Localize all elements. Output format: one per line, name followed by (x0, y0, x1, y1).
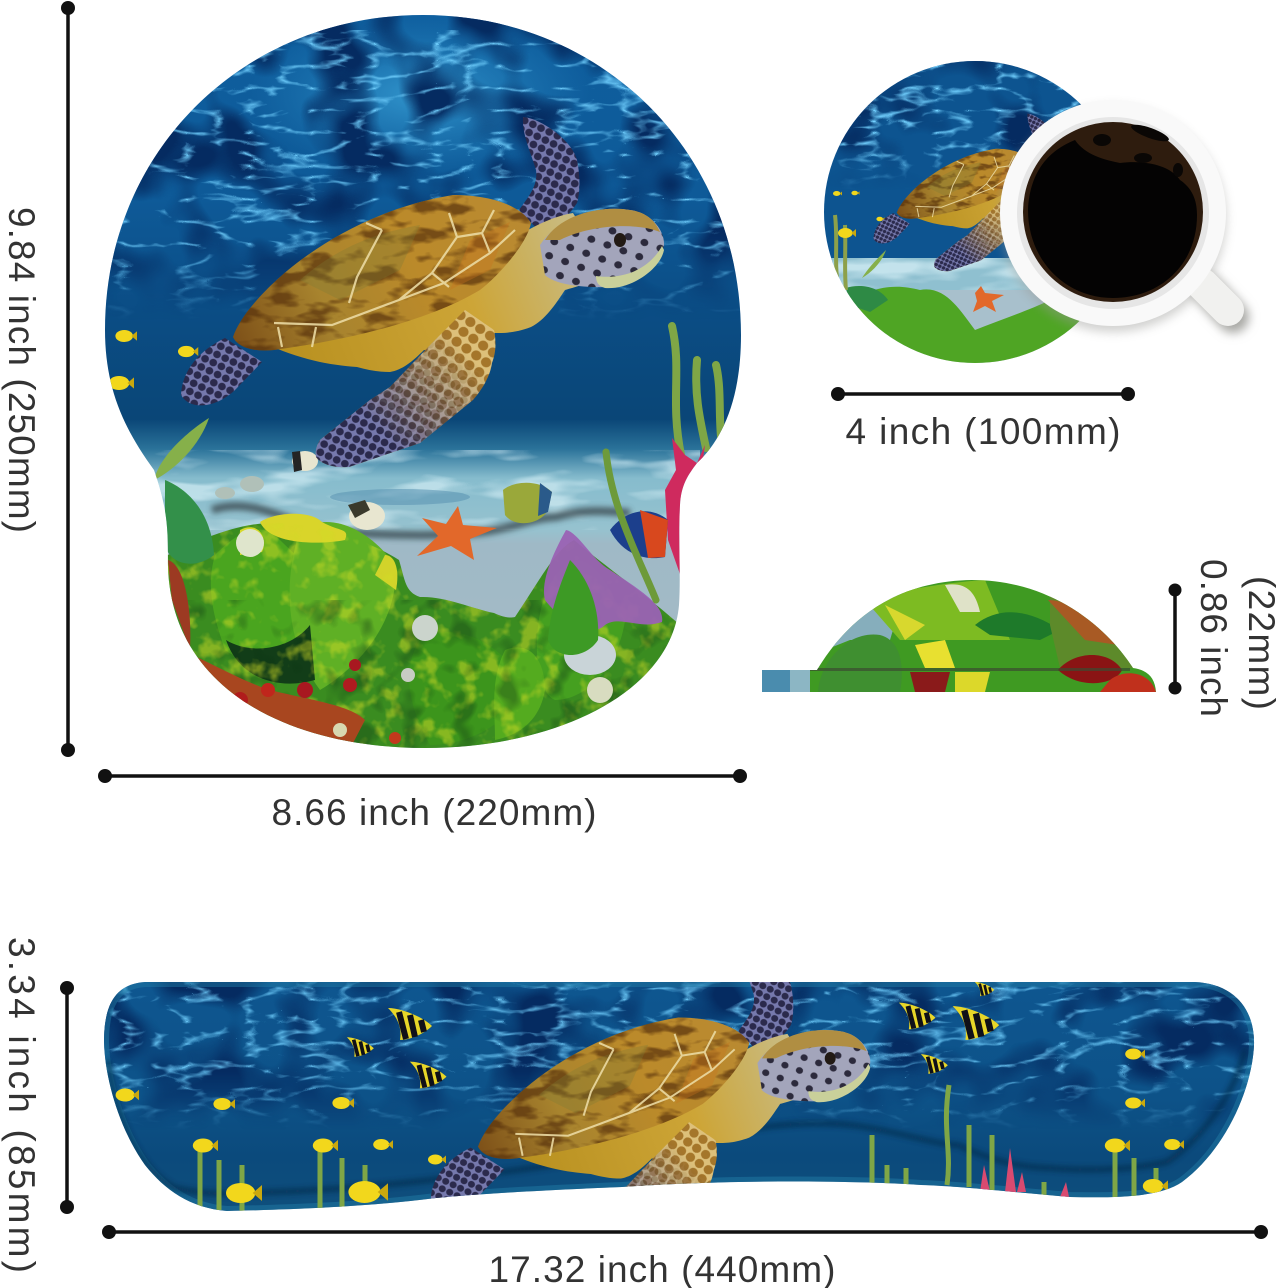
seaweed front (606, 452, 656, 600)
tropical fish (109, 330, 668, 558)
panel: wrist support side profile (762, 575, 1160, 695)
dimension: coaster width: 4 inch (100mm) (846, 411, 1120, 452)
sand dark patch (330, 489, 470, 505)
dimension: wrist rest height (1, 937, 74, 1273)
panel: round coaster (824, 61, 1081, 363)
cushion edge line (108, 1050, 1245, 1194)
cushion edge band (104, 982, 1254, 1211)
icon: coffee cup (1000, 100, 1233, 332)
purple coral (544, 530, 662, 630)
pink coral (665, 438, 705, 580)
starfish (417, 506, 497, 560)
dimension: coaster width (831, 387, 1135, 452)
sand ripples (140, 450, 700, 530)
water light at surface (282, 31, 558, 160)
sea turtle (181, 117, 664, 467)
panel: mouse pad with wrist support (100, 10, 750, 760)
striped fish (347, 982, 999, 1088)
seaweed (200, 1085, 1156, 1215)
dimension: mouse pad height: 9.84 inch (250mm) (1, 207, 42, 533)
foliage: green plants (150, 480, 690, 760)
dimension: mouse pad height (1, 1, 75, 757)
wrist rest edge (212, 506, 630, 535)
seaweed (672, 326, 722, 455)
seaweed leaf left (154, 418, 209, 480)
dimension: profile height: 0.86 inch (1193, 559, 1234, 717)
dimension: wrist rest width (102, 1225, 1268, 1288)
water texture (108, 16, 736, 312)
dimension: mouse pad width (98, 769, 747, 833)
dimension: mouse pad width: 8.66 inch (220mm) (272, 792, 596, 833)
dimension: wrist rest height: 3.34 inch (85mm) (1, 937, 42, 1273)
sea turtle (430, 982, 870, 1199)
yellow fish (116, 1048, 1184, 1203)
panel: keyboard wrist rest (104, 982, 1254, 1211)
dimension: profile height (1168, 559, 1280, 717)
green leaf over coral (548, 560, 598, 655)
water texture (104, 982, 1254, 1125)
pink coral (980, 1148, 1069, 1197)
